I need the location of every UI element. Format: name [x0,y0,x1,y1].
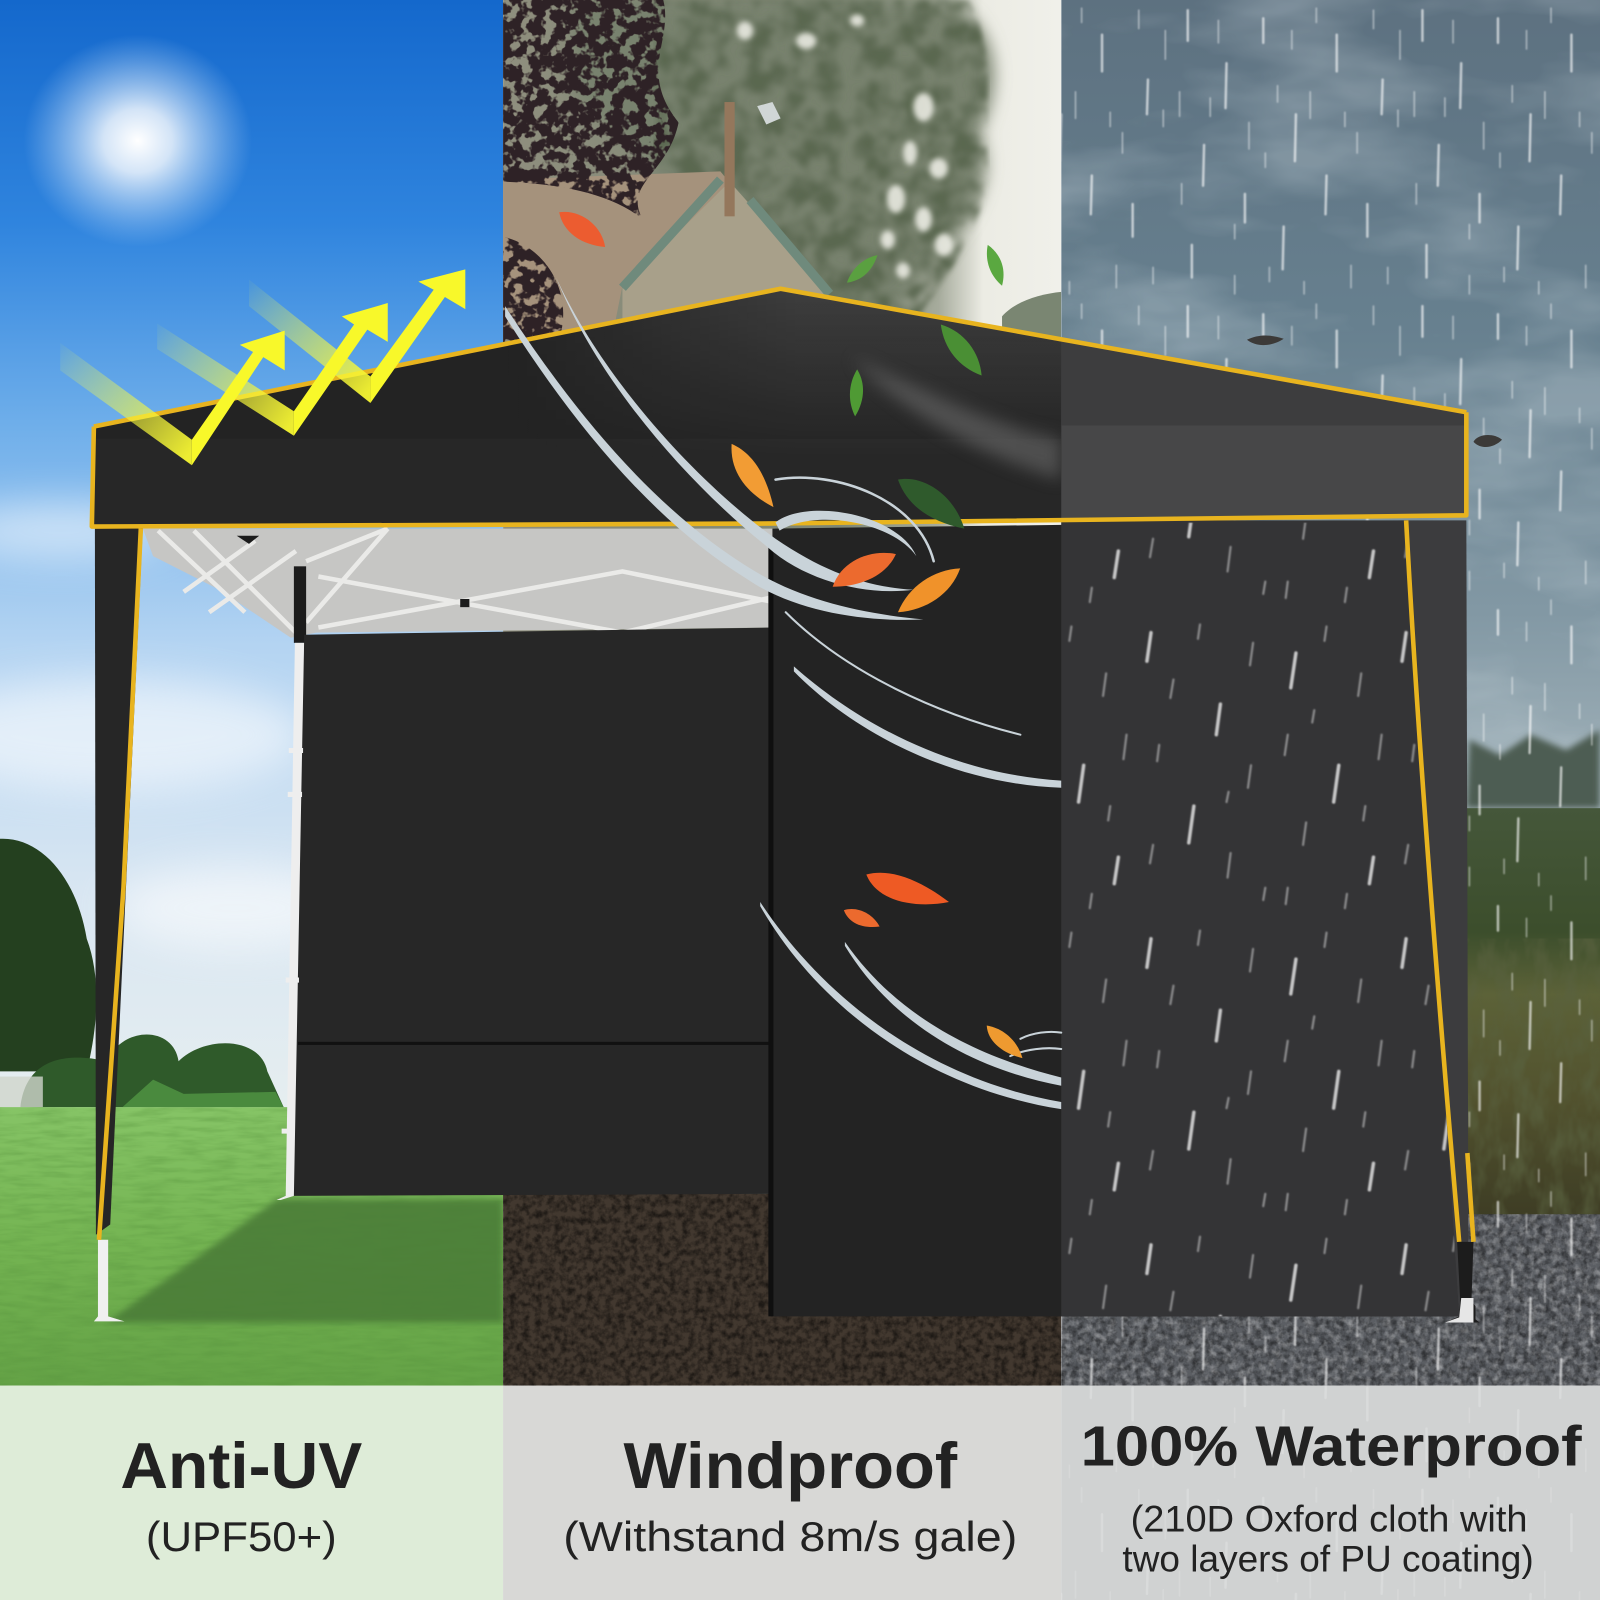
rainy wall section [1061,520,1469,1318]
white pole [277,643,304,1200]
icon: sun glow [23,35,252,247]
tree [571,0,994,316]
yellow trim [92,289,1473,1242]
caption: 100% Waterproof [1081,1414,1582,1579]
bottom caption strip [0,1386,1600,1600]
ceiling underside [143,529,776,638]
caption: 100% Waterproof: two layers of PU coating) [1122,1538,1534,1579]
grass [0,1107,503,1386]
front left leg [94,1240,124,1321]
falling leaves [559,212,1022,1058]
caption: Windproof: Windproof [623,1429,957,1502]
caption: Anti-UV: Anti-UV [120,1429,363,1502]
translucent roof panel: rainy side [1061,340,1466,519]
truss frame [158,529,773,633]
left side wall [95,527,143,1235]
distant trees [1466,730,1600,808]
back wall [291,628,772,1196]
roof and valance [94,289,1466,527]
caption: Anti-UV: (UPF50+) [146,1513,337,1560]
caption: 100% Waterproof: (210D Oxford cloth with [1131,1499,1528,1540]
leg foot right [1445,1242,1480,1322]
wind swirl lines [505,278,1061,1109]
trees on horizon [0,839,284,1109]
canopy tent [92,289,1480,1322]
gravel [1061,1214,1600,1386]
panel: windy background [503,0,1061,1386]
caption: Windproof [563,1429,1017,1560]
panel: sunny background [0,0,503,1386]
flying debris [1247,335,1502,447]
house [503,102,1061,347]
caption: Anti-UV [120,1429,363,1560]
arrows: reflected UV rays [60,269,465,465]
translucent roof panel: windy side [626,291,1061,482]
caption: 100% Waterproof: 100% Waterproof [1081,1414,1582,1477]
right side wall [770,520,1459,1316]
field [1466,808,1600,1221]
panel: rainy background [1061,0,1600,1386]
tent shadow on grass [107,1199,503,1322]
dirt ground [503,1194,1061,1386]
frame joints [237,536,469,643]
rain streaks [1061,0,1600,1386]
dark red tree foliage [503,0,679,352]
caption: Windproof: (Withstand 8m/s gale) [563,1513,1017,1560]
